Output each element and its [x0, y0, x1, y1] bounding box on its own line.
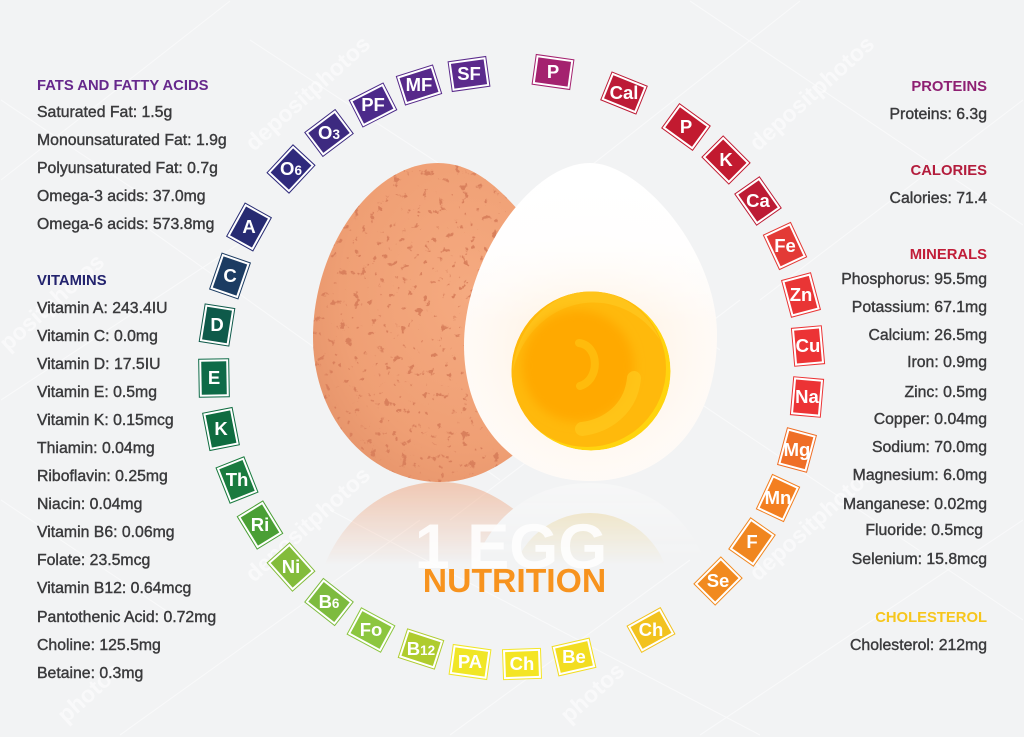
nutrient list: fats: Saturated Fat: 1.5g	[37, 104, 172, 121]
badge: Cu	[791, 326, 825, 366]
badge: P protein: P	[547, 61, 559, 82]
badge: Ni: Ni	[282, 556, 300, 577]
egg reflection	[330, 482, 660, 555]
nutrient list: vitamins: Betaine: 0.3mg	[37, 665, 143, 682]
badge: PA	[449, 645, 491, 679]
nutrient list: minerals	[841, 271, 987, 568]
badge: Cal	[601, 72, 647, 114]
badge: PF: PF	[361, 94, 385, 115]
nutrient list: vitamins: Vitamin E: 0.5mg	[37, 384, 157, 401]
badge: SF	[448, 57, 490, 91]
badge: F	[729, 518, 775, 566]
badge: Mg: Mg	[784, 439, 810, 460]
nutrient list: fats: Omega-6 acids: 573.8mg	[37, 216, 214, 233]
nutrient list: vitamins: Vitamin D: 17.5IU	[37, 356, 161, 373]
badge: Mg	[778, 428, 816, 472]
nutrient list: minerals: Zinc: 0.5mg	[904, 384, 987, 401]
badge: O6	[267, 145, 315, 193]
heading: cholesterol: CHOLESTEROL	[875, 610, 987, 626]
badge: Fe: Fe	[774, 235, 796, 256]
panel: proteins	[890, 79, 987, 123]
badge: Mn	[756, 474, 800, 522]
badge: Be	[552, 638, 596, 676]
nutrient list: vitamins: Niacin: 0.04mg	[37, 496, 142, 513]
badge: A	[227, 203, 271, 251]
badge: Mn: Mn	[765, 487, 791, 508]
heading: fats and fatty acids: FATS AND FATTY ACIDS	[37, 78, 209, 94]
watermark pattern: depositphotos	[240, 461, 375, 587]
watermark pattern: depositphotos	[240, 30, 375, 156]
nutrient list: fats: Omega-3 acids: 37.0mg	[37, 188, 206, 205]
badge: Ch choline: Ch	[510, 653, 534, 674]
badge: K vitamin	[203, 407, 239, 451]
nutrient list: vitamins: Pantothenic Acid: 0.72mg	[37, 609, 216, 626]
heading: minerals: MINERALS	[910, 247, 987, 263]
badge: Fe	[763, 222, 807, 270]
badge: C: C	[223, 265, 237, 286]
badge: Na: Na	[795, 386, 820, 407]
panel: fats and fatty acids	[37, 78, 227, 233]
watermark pattern: depositphotos	[744, 460, 879, 586]
badge: P phosphorus	[662, 104, 710, 150]
brown egg	[313, 163, 516, 482]
badge: K vitamin: K	[214, 418, 228, 439]
badge: MF	[396, 65, 442, 105]
badge: P phosphorus: P	[680, 116, 692, 137]
badge: E	[199, 359, 229, 397]
heading: vitamins: VITAMINS	[37, 273, 107, 289]
nutrient: proteins: Proteins: 6.3g	[890, 106, 987, 123]
badge: F: F	[746, 531, 758, 552]
nutrient list: minerals: Iron: 0.9mg	[907, 354, 987, 371]
panel: calories	[890, 163, 987, 207]
nutrient list: vitamins: Vitamin B12: 0.64mcg	[37, 580, 191, 597]
nutrient list: minerals: Copper: 0.04mg	[874, 411, 987, 428]
badge: SF: SF	[457, 63, 481, 84]
badge: Th	[216, 457, 258, 503]
nutrient list: minerals: Potassium: 67.1mg	[852, 299, 987, 316]
badge: Zn	[782, 273, 820, 317]
badge: A: A	[242, 216, 256, 237]
badge: Cal: Cal	[610, 82, 638, 103]
badge: C	[210, 253, 250, 299]
badge: Se: Se	[707, 570, 729, 591]
nutrient list: minerals: Sodium: 70.0mg	[872, 439, 987, 456]
nutrient list: minerals: Selenium: 15.8mcg	[852, 551, 987, 568]
badge: E: E	[208, 367, 220, 388]
watermark pattern: depositphotos	[491, 246, 626, 372]
badge: Ca	[735, 177, 781, 225]
peeled egg half	[464, 163, 717, 481]
badge: PF	[349, 83, 397, 127]
badge: Fo	[347, 608, 395, 652]
nutrient list: minerals: Magnesium: 6.0mg	[853, 467, 987, 484]
badge: D: D	[210, 314, 224, 335]
nutrient: cholesterol: Cholesterol: 212mg	[850, 637, 987, 654]
badge: B6	[305, 578, 353, 626]
badge: O3	[305, 110, 353, 156]
badge: Fo: Fo	[360, 619, 382, 640]
badge: B6: B6	[319, 591, 340, 612]
nutrient list: vitamins: Vitamin K: 0.15mcg	[37, 412, 174, 429]
nutrient list: vitamins: Vitamin A: 243.4IU	[37, 300, 168, 317]
nutrient: calories: Calories: 71.4	[890, 190, 987, 207]
nutrient list: fats: Polyunsaturated Fat: 0.7g	[37, 160, 218, 177]
badge: Se	[694, 557, 742, 605]
nutrient list: vitamins: Folate: 23.5mcg	[37, 552, 150, 569]
nutrient list: minerals: Fluoride: 0.5mcg	[865, 522, 983, 539]
nutrient list: vitamins	[37, 300, 216, 682]
badge: Ca: Ca	[746, 190, 771, 211]
badge: Ch cholesterol: Ch	[639, 619, 663, 640]
panel: cholesterol	[850, 610, 987, 654]
panel: vitamins	[37, 273, 216, 682]
nutrient list: vitamins: Choline: 125.5mg	[37, 637, 161, 654]
badge: O6: O6	[280, 158, 302, 179]
badge: B12: B12	[407, 638, 435, 659]
title: 1 egg: 1 EGG	[415, 512, 607, 582]
badge: P protein	[532, 55, 574, 89]
nutrient list: vitamins: Vitamin C: 0.0mg	[37, 328, 158, 345]
nutrient list: vitamins: Riboflavin: 0.25mg	[37, 468, 168, 485]
nutrient list: vitamins: Vitamin B6: 0.06mg	[37, 524, 175, 541]
badge: PA: PA	[458, 651, 482, 672]
badge: K potassium: K	[719, 149, 733, 170]
watermark pattern: depositphotos	[744, 30, 879, 156]
badge: Th: Th	[226, 469, 248, 490]
egg yolk	[508, 289, 670, 450]
nutrient list: vitamins: Thiamin: 0.04mg	[37, 440, 155, 457]
nutrient badge ring	[199, 55, 825, 680]
heading: calories: CALORIES	[911, 163, 987, 179]
badge: D	[199, 304, 235, 346]
watermark pattern: photos	[52, 657, 126, 728]
nutrient list: minerals: Manganese: 0.02mg	[843, 496, 987, 513]
watermark pattern: photos	[555, 657, 629, 728]
badge: Ri: Ri	[251, 514, 269, 535]
badge: Ch cholesterol	[627, 608, 675, 652]
badge: Ch choline	[502, 648, 542, 680]
nutrient list: minerals: Calcium: 26.5mg	[868, 327, 987, 344]
badge: Cu: Cu	[796, 335, 820, 356]
badge: MF: MF	[406, 74, 432, 95]
badge: Be: Be	[562, 646, 586, 667]
panel: minerals	[841, 247, 987, 568]
badge: O3: O3	[318, 122, 340, 143]
title: nutrition: NUTRITION	[423, 562, 606, 600]
badge: K potassium	[702, 136, 750, 184]
heading: proteins: PROTEINS	[911, 79, 987, 95]
badge: Zn: Zn	[790, 284, 812, 305]
badge: Na	[790, 377, 824, 417]
badge: B12	[398, 629, 444, 669]
nutrient list: fats	[37, 104, 227, 233]
nutrient list: minerals: Phosphorus: 95.5mg	[841, 271, 987, 288]
badge: Ri	[237, 501, 283, 549]
nutrient list: fats: Monounsaturated Fat: 1.9g	[37, 132, 227, 149]
badge: Ni	[267, 543, 315, 591]
